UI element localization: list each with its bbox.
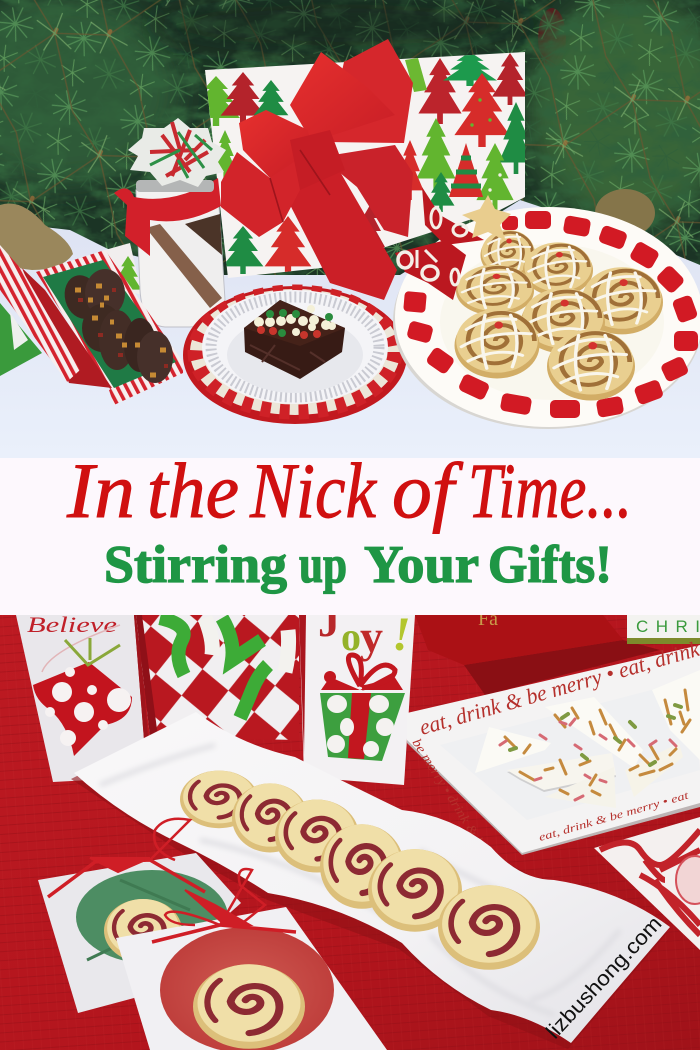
jar of cookie mix <box>114 118 226 327</box>
red swirl plate corner <box>594 817 700 950</box>
card lettering: Believe <box>27 612 117 637</box>
polka-dot ornament <box>33 638 132 756</box>
inner plate <box>227 330 363 393</box>
cupcake liner <box>676 856 700 904</box>
pinwheel cookies <box>180 771 540 970</box>
chocolate brownie <box>244 300 345 379</box>
jar satin ribbon <box>114 178 221 256</box>
Joy lettering: ! <box>392 608 411 661</box>
dark red ornament behind gift <box>538 8 566 68</box>
paper pom-pom <box>128 118 226 187</box>
white title band <box>0 458 700 615</box>
green curling ribbon <box>160 618 268 718</box>
burlap tree base left <box>0 204 73 270</box>
chocolate bark rounds <box>60 269 173 383</box>
burlap tree base right <box>595 189 655 231</box>
table cloth <box>0 200 700 458</box>
red satin bow <box>221 39 413 300</box>
red ribbon bow <box>48 819 205 897</box>
white curling ribbon <box>205 618 289 672</box>
cookie photo <box>193 964 305 1049</box>
subtitle: Stirring up Your Gifts!: Your <box>364 536 479 594</box>
pine tree background <box>0 0 700 290</box>
rectangular holiday plate: be merry • drink & be <box>409 736 491 854</box>
red quilted cloth <box>0 615 700 1050</box>
cinnamon rolls <box>454 230 663 400</box>
red scarf with fringe: Fa <box>478 608 498 630</box>
chocolate box <box>0 245 183 405</box>
wrapped gift box <box>192 52 533 278</box>
lace doily <box>202 290 388 404</box>
Joy lettering <box>320 615 408 662</box>
jar lid glass <box>136 180 214 192</box>
title: In the Nick of Time...: Time... <box>468 447 632 534</box>
photo: pinwheel cookies on red cloth <box>0 597 700 1050</box>
gift tag: green circle <box>38 819 241 1013</box>
Joy lettering: o <box>341 614 361 659</box>
stripe scrap on gift <box>405 58 427 92</box>
red ribbon windows <box>403 211 699 418</box>
title: In the Nick of Time...: of <box>392 447 464 534</box>
striped tree <box>449 143 483 197</box>
subtitle: Stirring up Your Gifts!: Stirring <box>104 536 287 594</box>
small gift behind jar <box>105 243 142 295</box>
Joy lettering: y <box>360 611 383 662</box>
title: In the Nick of Time...: the <box>147 447 239 534</box>
subtitle: Stirring up Your Gifts!: up <box>299 536 347 594</box>
photo: gifts under the tree <box>0 0 700 458</box>
red scarf with fringe <box>415 608 660 695</box>
star cookie <box>462 195 511 241</box>
large heart-cut plate with cinnamon rolls <box>393 207 700 429</box>
gift icon <box>320 655 405 761</box>
plate lettering: eat, drink & be merry • eat, drink <box>416 636 700 740</box>
Joy gift bag <box>299 597 415 785</box>
title: In the Nick of Time... <box>66 447 632 534</box>
harlequin gift bag <box>136 615 299 740</box>
brownie plate <box>183 286 407 424</box>
white chocolate bark <box>475 670 700 808</box>
Christmas card corner <box>627 615 700 644</box>
cookie photo <box>104 899 182 962</box>
gift tag: red circle <box>116 869 387 1050</box>
rectangular holiday plate: eat, drink & be merry • eat <box>538 789 691 844</box>
Christmas card corner: CHRI <box>636 617 700 636</box>
rectangular holiday plate <box>407 636 700 855</box>
long white platter <box>71 712 670 1049</box>
title: In the Nick of Time...: Nick <box>249 447 377 534</box>
watermark: lizbushong.com: lizbushong.com <box>542 912 666 1043</box>
subtitle: Stirring up Your Gifts! <box>104 536 612 594</box>
subtitle: Stirring up Your Gifts!: Gifts! <box>488 536 612 594</box>
HO HO ribbon <box>395 187 484 300</box>
Joy lettering: J <box>318 597 340 646</box>
red ribbon bow <box>152 869 296 942</box>
Believe card <box>16 612 150 782</box>
small gift tree <box>120 256 140 290</box>
title: In the Nick of Time...: In <box>66 447 135 534</box>
